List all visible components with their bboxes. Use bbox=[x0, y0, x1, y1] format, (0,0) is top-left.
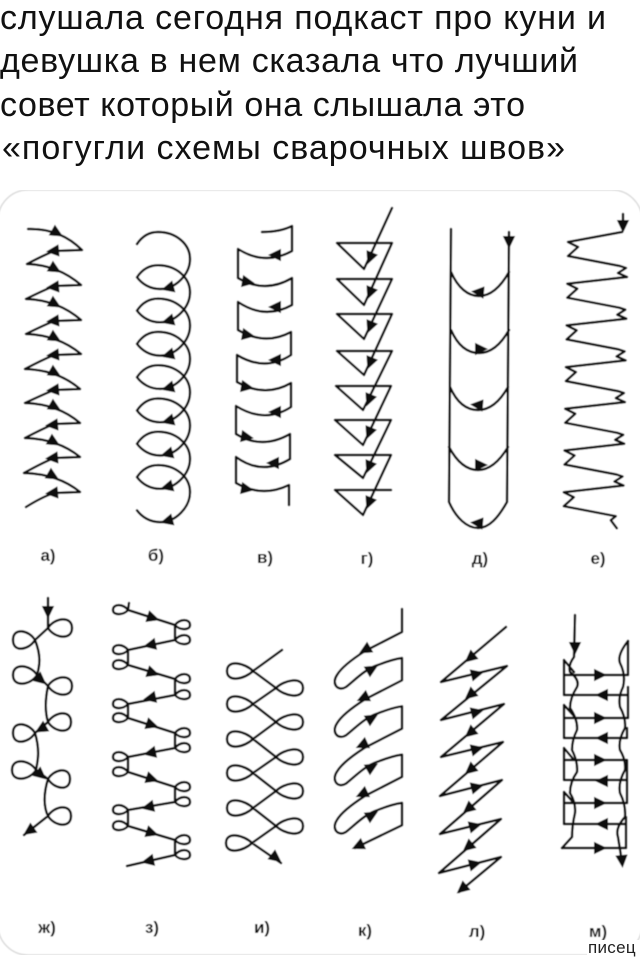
pattern labels: г) bbox=[361, 549, 373, 568]
pattern labels: и) bbox=[254, 918, 270, 937]
pattern и bbox=[226, 650, 303, 867]
pattern г bbox=[335, 208, 392, 515]
pattern labels bbox=[37, 546, 607, 941]
pattern labels: з) bbox=[145, 918, 159, 937]
pattern labels: д) bbox=[472, 549, 488, 568]
pattern л bbox=[439, 627, 507, 898]
heading bbox=[0, 0, 606, 167]
heading: девушка в нем сказала что лучший bbox=[0, 42, 578, 80]
pattern м bbox=[562, 615, 629, 869]
pattern labels: к) bbox=[358, 921, 372, 940]
pattern д bbox=[449, 229, 515, 530]
pattern labels: в) bbox=[257, 548, 273, 567]
pattern labels: б) bbox=[148, 546, 164, 565]
pattern labels: л) bbox=[469, 922, 485, 941]
heading: совет который она слышала это bbox=[0, 86, 525, 124]
pattern labels: а) bbox=[40, 546, 56, 565]
pattern а bbox=[24, 225, 82, 507]
pattern labels: е) bbox=[590, 549, 606, 568]
heading: слушала сегодня подкаст про куни и bbox=[0, 0, 606, 37]
pattern к bbox=[335, 609, 402, 855]
pattern з bbox=[113, 603, 190, 869]
pattern б bbox=[137, 232, 190, 529]
watermark: писец bbox=[588, 938, 636, 957]
pattern в bbox=[236, 226, 292, 505]
heading: «погугли схемы сварочных швов» bbox=[2, 129, 565, 167]
pattern е bbox=[564, 214, 629, 528]
pattern labels: ж) bbox=[37, 918, 56, 937]
panel: weld patterns card bbox=[0, 190, 640, 955]
pattern labels: м) bbox=[589, 922, 607, 941]
pattern ж bbox=[12, 598, 72, 840]
